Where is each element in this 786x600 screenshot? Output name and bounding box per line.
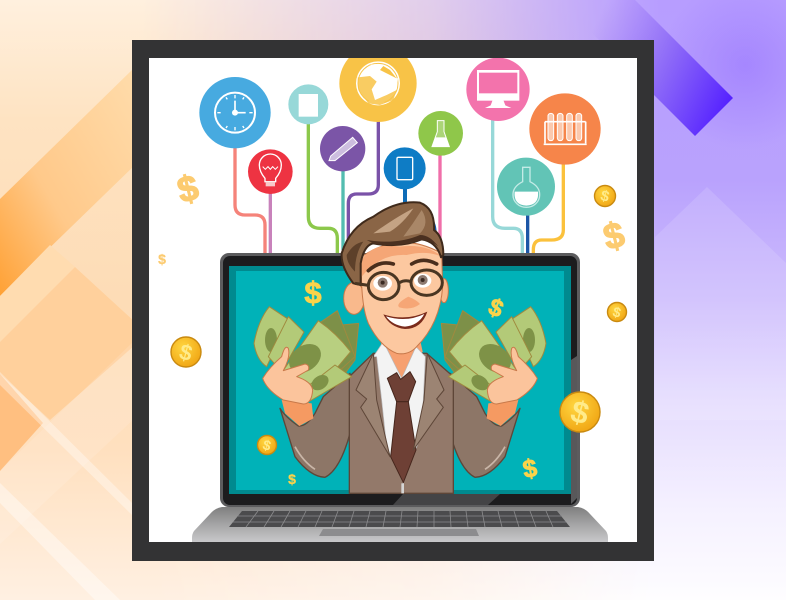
ears [344, 279, 448, 314]
connector lines and topic circles [199, 45, 601, 253]
icon: green flask [418, 111, 463, 156]
gold dollar signs on screen: $ [521, 454, 539, 484]
connector lines [235, 118, 563, 253]
orange dollar signs: $ [173, 166, 203, 211]
left arm [280, 373, 350, 477]
coin dollar marks: $ [177, 339, 195, 366]
icon: monitor [466, 58, 530, 121]
orange dollar signs [158, 166, 629, 267]
icon: round flask [497, 158, 555, 216]
torso and suit [349, 332, 453, 493]
gold dollar signs on screen [288, 275, 539, 487]
forehead shadow [362, 246, 442, 277]
face [361, 242, 443, 354]
coin dollar marks: $ [261, 436, 273, 454]
coin dollar marks: $ [611, 303, 623, 321]
keyboard [229, 511, 570, 527]
shirt [373, 342, 425, 483]
trackpad [319, 529, 479, 536]
eyes [373, 274, 431, 291]
tie [387, 372, 416, 483]
laptop [192, 253, 608, 542]
icon: pencil [320, 126, 365, 171]
coin dollar marks: $ [567, 393, 593, 432]
dark picture frame [132, 40, 654, 561]
neck [381, 332, 423, 380]
right arm [450, 373, 520, 477]
mouth [383, 312, 427, 329]
coin dollar marks: $ [599, 187, 612, 206]
screen bezel [220, 253, 580, 507]
icon: clock [199, 77, 271, 148]
orange dollar signs: $ [158, 251, 166, 267]
money in left hand [254, 307, 359, 401]
orange dollar signs: $ [599, 213, 629, 258]
icon: notepad [288, 84, 328, 124]
gold dollar signs on screen: $ [304, 275, 322, 310]
money in right hand [441, 307, 546, 401]
coin dollar marks [177, 187, 623, 454]
teal screen [229, 266, 571, 494]
glasses [355, 270, 442, 300]
businessman [254, 202, 546, 493]
gold dollar signs on screen: $ [485, 293, 508, 324]
gold coins [171, 186, 626, 454]
violet diamond band [560, 0, 733, 136]
hair [342, 202, 443, 285]
icon: test tubes [529, 93, 601, 165]
left hand [263, 347, 313, 426]
lapels [356, 353, 444, 457]
gold dollar signs on screen: $ [288, 471, 296, 487]
icon: light bulb [248, 149, 293, 194]
icon: tablet [384, 147, 426, 189]
right hand [487, 347, 537, 426]
nose [398, 297, 420, 308]
white panel [140, 48, 645, 552]
icon: globe [339, 45, 417, 122]
laptop base [192, 507, 608, 542]
eyebrows [368, 260, 437, 271]
